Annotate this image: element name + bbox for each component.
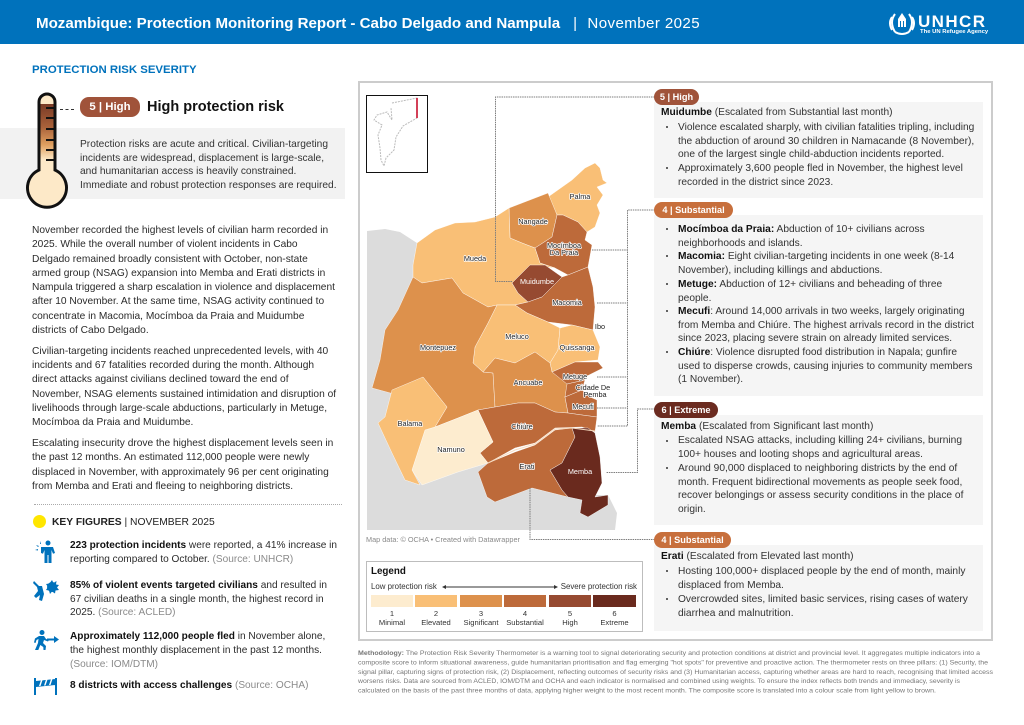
legend colour scale: 5 [568,609,572,618]
Memba text: 100+ houses and looting shops and agricultural areas. [678,449,923,460]
methodology note [358,650,994,694]
paragraph 3: from Memba and Erati and fleeing to neighboring districts. [32,481,293,492]
paragraph 3: displaced in November, with approximately 96 per cent originating [32,467,329,478]
district labels: Ibo [595,322,605,331]
paragraph 1: 2025. While the overall number of violent incidents in Cabo [32,239,298,250]
text block: narrative [32,225,336,492]
severity badge: 5 | High [89,101,131,113]
map: districts choropleth: Muidumbe [520,277,554,286]
legend colour scale: 4 [523,609,527,618]
logo: UNHCR: The UN Refugee Agency [920,29,988,35]
severity badge [80,97,140,117]
legend colour scale: Extreme [600,618,629,627]
map: districts choropleth: Memba [568,467,593,476]
legend colour scale: 6 [612,609,617,618]
key figure: displacement: (Source: IOM/DTM) [70,659,158,670]
Muidumbe text: recorded in the district since 2023. [678,177,833,188]
Substantial district text [666,224,974,385]
Erati text: diarrhea and malnutrition. [678,608,794,619]
section heading: PROTECTION RISK SEVERITY [32,64,197,76]
badge: 4 Substantial: 4 | Substantial [662,205,725,215]
paragraph 3: Escalating insecurity drove the highest displacement levels seen in [32,438,333,449]
severity heading: High protection risk [147,99,284,115]
panel: Substantial districts [654,215,983,396]
map credit: Map data: © OCHA • Created with Datawrapper [366,535,520,544]
key figure: incidents [35,540,337,565]
district labels: Nangade [518,217,548,226]
district labels: Cidade De [576,383,610,392]
badge: 4 Substantial [654,202,733,218]
panel: Muidumbe [654,102,983,198]
badge: 5 High: 5 | High [660,92,693,102]
key figure: incidents: 223 protection incidents were reported, a 41% increase in [70,540,337,551]
paragraph 1: armed group (NSAG) expansion into Memba and Erati districts in [32,268,325,279]
description text: incidents are widespread, displacement is large-scale, [80,153,324,164]
district labels: Namuno [437,445,465,454]
panel: Memba [654,415,983,525]
thermometer pointer [60,109,74,110]
key figure: displacement: Approximately 112,000 people fled in November alone, [70,631,325,642]
Substantial district text: Mocímboa da Praia: Abduction of 10+ civilians across [678,224,925,235]
Substantial district text: Mecufi: Around 14,000 arrivals in two weeks, largely originating [678,306,965,317]
legend colour scale [371,595,636,627]
icon: person fleeing [34,630,59,650]
district labels: Da Praia [550,248,579,257]
paragraph 1: Delgado remained broadly consistent with October, non-state [32,254,308,265]
methodology note: worsens risks. Data are sourced from ACLED, IOM/DTM and OCHA and each indicator is normalised and combined using weights. To ensure the index reflects both trends and immediacy, severity is [358,678,961,685]
Memba text: Around 90,000 displaced to neighboring districts by the end of [678,463,957,474]
Erati text: Hosting 100,000+ displaced people by the end of month, mainly [678,566,965,577]
paragraph 3: the past 12 months. An estimated 112,000 people were newly [32,452,309,463]
legend colour scale: Substantial [506,618,544,627]
legend [366,561,643,632]
locator inset map [366,95,428,173]
key figure: civilians targeted: 67 civilian deaths in a single month, the highest record in [70,594,324,604]
key figure: displacement: the highest monthly displacement in the past 12 months. [70,645,322,656]
district labels: Macomia [552,298,583,307]
panel: severity description [0,128,345,199]
paragraph 2: direct attacks against civilians declined toward the end of [32,374,289,385]
paragraph 2: livelihoods through large-scale abductions, particularly in Metuge, [32,403,327,414]
Muidumbe text: one of the largest single child-abduction incidents reported. [678,149,944,160]
Muidumbe text [661,107,974,188]
description text: and humanitarian access is heavily constrained. [80,166,296,177]
Substantial district text: Chiúre: Violence disrupted food distribution in Napala; gunfire [678,347,957,358]
icon: yellow marker [33,515,46,528]
key figure: civilians targeted [33,580,327,618]
legend colour scale: 1 [390,609,394,618]
icon: thermometer [26,92,68,209]
district labels: Ancuabe [514,378,542,387]
badge: 5 High [654,89,699,105]
district labels: Erati [519,462,535,471]
paragraph 1: Nampula triggered a sharp escalation in violence and displacement [32,282,335,293]
map: districts choropleth [367,96,654,540]
methodology note: signal pillar, capturing signs of protection risk, (2) Displacement, reflecting outcomes of security risks and (3) Humanitarian access, capturing whether areas are hard to reach, recognising that limited access [358,669,994,676]
province boundary [488,428,595,463]
Muidumbe text: Muidumbe (Escalated from Substantial last month) [661,107,893,118]
icon: barrier [34,678,57,695]
district labels: Mueda [464,254,487,263]
badge: 4 Substantial (Erati): 4 | Substantial [661,535,724,545]
paragraph 1: after 10 November. At the same time, NSAG activity continued to [32,296,324,307]
icon: violence [33,580,59,601]
neighbouring land [367,229,617,530]
districts [372,163,608,517]
badge: 6 Extreme: 6 | Extreme [661,405,711,415]
paragraph 1: November recorded the highest levels of civilian harm recorded in [32,225,328,236]
Erati text: displaced from Memba. [678,580,784,591]
description text: Immediate and robust protection responses are required. [80,180,337,191]
Substantial district text: since 2023, placing severe strain on already limited services. [678,333,952,344]
legend colour scale: Significant [463,618,499,627]
key figure: civilians targeted: 85% of violent events targeted civilians and resulted in [70,580,327,591]
district labels: Meluco [505,332,529,341]
Memba text: origin. [678,504,706,515]
Memba text: recover belongings or assess security conditions in the place of [678,490,963,501]
Substantial district text: neighborhoods and islands. [678,238,803,249]
Memba text: Escalated NSAG attacks, including killing 24+ civilians, burning [678,435,962,446]
description text: Protection risks are acute and critical. Civilian-targeting [80,139,328,150]
district labels: Montepuez [420,343,456,352]
Substantial district text: people. [678,293,711,304]
Substantial district text: Macomia: Eight civilian-targeting incidents in one week (8-14 [678,251,954,262]
paragraph 1: districts of Cabo Delgado. [32,325,149,336]
header banner [0,0,1024,44]
legend title: Legend [371,566,406,577]
description text [80,139,337,191]
legend colour scale: 2 [434,609,438,618]
district labels: Chiúre [511,422,533,431]
legend colour scale: Minimal [379,618,405,627]
methodology note: Methodology: The Protection Risk Severity Thermometer is a warning tool to signal deteriorating security and protection conditions at district and provincial level. It aggregates multiple indicators into a [358,650,980,657]
district labels: Metuge [563,372,587,381]
paragraph 1 [32,225,335,336]
legend colour scale: 3 [479,609,483,618]
legend scale ends: Low protection risk [371,582,437,591]
paragraph 2: November, NSAG elements sustained intimidation and disruption of [32,389,336,400]
paragraph 1: concentrate in Macomia, Mocímboa da Praia and Muidumbe [32,311,304,322]
paragraph 2: incidents and 67 fatalities recorded during the month. Although [32,360,314,371]
Memba text: Memba (Escalated from Significant last month) [661,421,873,432]
key figure: access [34,678,308,695]
paragraph 2: Mocímboa da Praia and Muidumbe. [32,417,193,428]
leader lines [496,97,655,540]
Muidumbe text: the abduction of around 30 children in Namacande (8 November), [678,136,974,147]
Erati text [661,551,968,619]
Erati text: Erati (Escalated from Elevated last month) [661,551,854,562]
Memba text: month. Frequent bidirectional movements as people seek food, [678,477,962,488]
district labels: Mocímboa [547,241,582,250]
key figures heading: KEY FIGURES | NOVEMBER 2025 [52,517,215,528]
district labels: Pemba [583,390,607,399]
Substantial district text: November), including killings and abductions. [678,265,882,276]
panel: map frame [358,81,993,641]
key figure: civilians targeted: 2025. (Source: ACLED) [70,607,176,618]
district labels: Balama [398,419,423,428]
Erati text: Overcrowded sites, limited basic services, rising cases of watery [678,594,968,605]
key figure: incidents: reporting compared to October. (Source: UNHCR) [70,554,293,565]
methodology note: composite score to inform situational awareness, guide humanitarian prioritisation and flag emerging "hot spots" for preventive and proactive action. The thermometer rests on three pillars: (1) Security, the [358,660,988,666]
arrow: low to severe [442,585,558,589]
Memba text [661,421,964,515]
legend colour scale: Elevated [421,618,451,627]
key figure: access: 8 districts with access challenges (Source: OCHA) [70,680,308,691]
district labels: Quissanga [560,343,595,352]
legend colour scale: High [562,618,578,627]
Muidumbe text: Violence escalated sharply, with civilian fatalities tripling, including [678,122,974,133]
icon: person under attack [35,540,55,563]
Substantial district text: (1 November). [678,374,743,385]
key figure: displacement [34,630,325,670]
district labels: Mecufi [572,402,594,411]
paragraph 3 [32,438,333,492]
Muidumbe text: Approximately 3,600 people fled in November, the highest level [678,163,963,174]
panel: Erati [654,545,983,631]
Substantial district text: Metuge: Abduction of 12+ civilians and beheading of three [678,279,942,290]
logo: UNHCR [889,12,988,35]
title: Mozambique: Protection Monitoring Report - Cabo Delgado and Nampula | November 2025 [36,15,700,32]
district labels: Palma [570,192,591,201]
Substantial district text: from Memba and Chiúre. The highest arrivals record in the district [678,320,974,331]
badge: 4 Substantial (Erati) [654,532,731,548]
methodology note: calculated on the basis of the past three months of data, applying higher weight to the most recent month. The composite score is translated into a colour scale from light yellow to brown. [358,688,936,694]
Substantial district text: used to disperse crowds, causing injuries to community members [678,361,972,372]
paragraph 2 [32,346,336,428]
legend: Severe protection risk [561,582,637,591]
logo: UNHCR: UNHCR [918,12,986,31]
badge: 6 Extreme [654,402,718,418]
district labels [398,192,610,471]
paragraph 2: Civilian-targeting incidents reached unprecedented levels, with 40 [32,346,328,357]
